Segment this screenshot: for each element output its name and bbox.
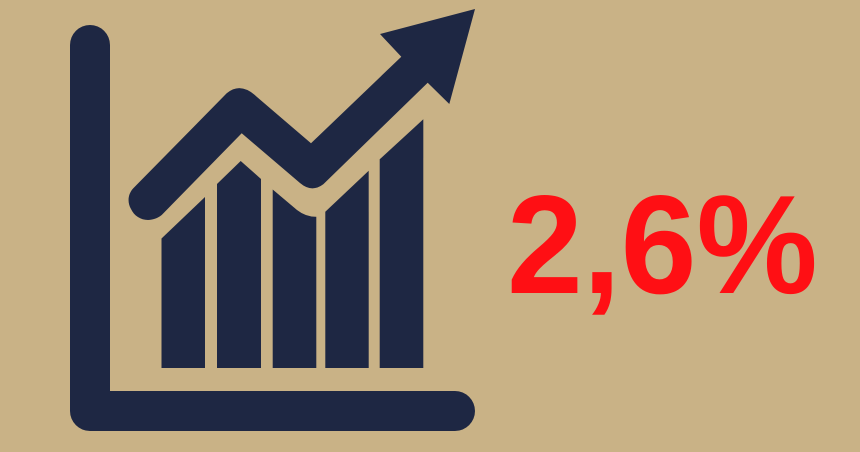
bar 1 — [162, 197, 205, 368]
icon: chart axes — [90, 45, 455, 411]
icon: rising trend arrow — [129, 9, 475, 220]
bar 5 — [380, 119, 423, 368]
bar 2 — [217, 161, 261, 368]
rate value: 2,6% — [507, 167, 818, 323]
bar 4 — [325, 171, 369, 368]
bar 3 — [273, 190, 316, 368]
bar chart — [162, 119, 423, 368]
